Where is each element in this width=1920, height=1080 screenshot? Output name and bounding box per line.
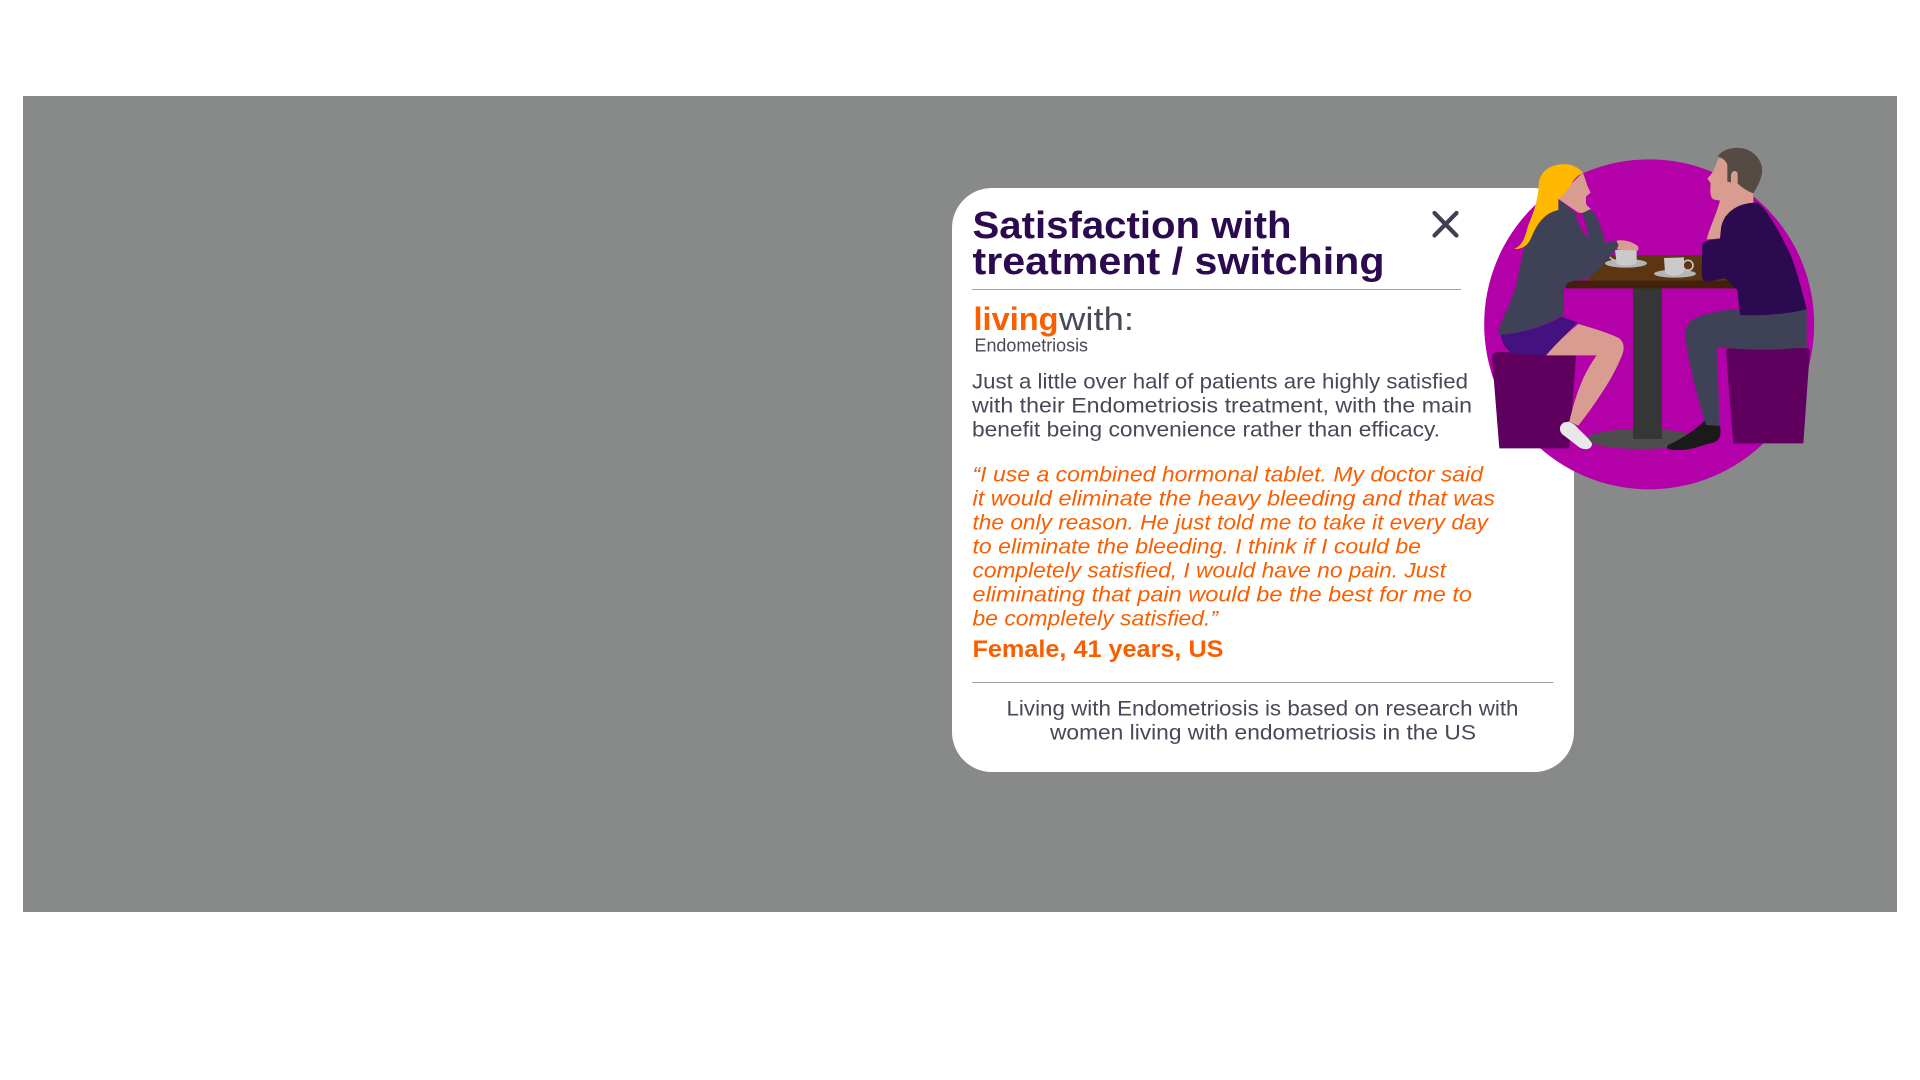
quote attribution: Female, 41 years, US bbox=[972, 636, 1224, 663]
text block: footer note bbox=[1006, 698, 1518, 744]
text block: summary: with their Endometriosis treatment, with the main bbox=[971, 394, 1472, 418]
logo: livingwith bbox=[974, 301, 1134, 356]
text block: patient quote: completely satisfied, I would have no pain. Just bbox=[972, 560, 1447, 582]
background overlay panel bbox=[23, 96, 1897, 912]
right cup bbox=[1654, 257, 1696, 278]
woman bbox=[1498, 164, 1638, 449]
text block: patient quote: “I use a combined hormonal tablet. My doctor said bbox=[972, 464, 1484, 486]
text block: summary bbox=[971, 370, 1472, 442]
illustration: two people talking over coffee bbox=[1484, 148, 1814, 489]
text block: patient quote: be completely satisfied.” bbox=[972, 608, 1219, 630]
magenta circle bbox=[1484, 159, 1814, 489]
text block: summary: benefit being convenience rather than efficacy. bbox=[972, 418, 1440, 442]
left cup bbox=[1605, 249, 1647, 268]
text block: footer note: Living with Endometriosis is based on research with bbox=[1006, 698, 1518, 720]
icon: close cross bbox=[1434, 213, 1456, 236]
left stool bbox=[1492, 352, 1576, 448]
text block: footer note: women living with endometriosis in the US bbox=[1049, 722, 1476, 744]
text block: patient quote: eliminating that pain would be the best for me to bbox=[972, 584, 1472, 606]
text block: patient quote: the only reason. He just told me to take it every day bbox=[972, 512, 1490, 534]
text block: patient quote bbox=[972, 464, 1496, 630]
title: treatment / switching bbox=[972, 241, 1384, 283]
title: Satisfaction with bbox=[972, 205, 1292, 247]
logo: livingwith: living bbox=[974, 301, 1058, 337]
text block: patient quote: to eliminate the bleeding. I think if I could be bbox=[972, 536, 1421, 558]
logo: livingwith: Endometriosis bbox=[974, 336, 1088, 356]
table bbox=[1565, 255, 1737, 449]
text block: patient quote: it would eliminate the heavy bleeding and that was bbox=[972, 488, 1496, 510]
panel: modal card bbox=[952, 188, 1574, 772]
logo: livingwith: with: bbox=[1058, 301, 1134, 337]
text block: summary: Just a little over half of patients are highly satisfied bbox=[972, 370, 1468, 394]
right stool bbox=[1726, 348, 1810, 443]
man bbox=[1667, 148, 1807, 450]
title bbox=[972, 205, 1384, 283]
